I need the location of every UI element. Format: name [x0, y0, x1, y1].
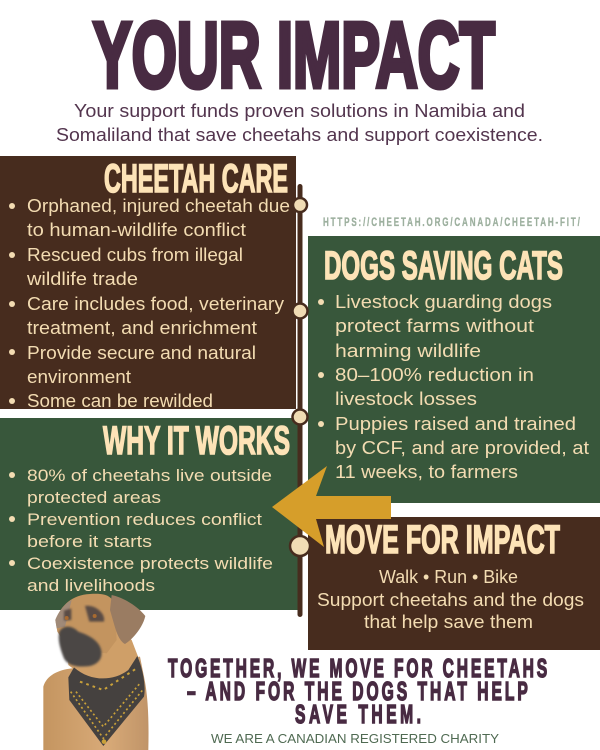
- bullets: cheetah care: Provide secure and natural: [27, 343, 256, 363]
- bullets: dogs saving cats: by CCF, and are provided, at: [335, 438, 589, 458]
- bullets: dogs saving cats: Livestock guarding dogs: [335, 292, 552, 312]
- closing statement: [168, 654, 547, 729]
- timeline: [290, 184, 310, 617]
- icon: dog with bandana: [43, 594, 149, 750]
- bullets: dogs saving cats: 80–100% reduction in: [335, 365, 534, 385]
- charity note: WE ARE A CANADIAN REGISTERED CHARITY: [211, 731, 499, 746]
- bullets: why it works: Prevention reduces conflict: [27, 510, 262, 529]
- closing statement: SAVE THEM.: [295, 700, 421, 729]
- bullets: why it works: [9, 466, 273, 595]
- bullets: why it works: before it starts: [27, 532, 152, 551]
- bullets: why it works: Coexistence protects wildlife: [27, 554, 273, 573]
- bullets: dogs saving cats: [318, 292, 589, 482]
- bullets: cheetah care: to human-wildlife conflict: [27, 220, 246, 240]
- url: HTTPS://CHEETAH.ORG/CANADA/CHEETAH-FIT/: [323, 217, 580, 229]
- bullets: cheetah care: treatment, and enrichment: [27, 318, 257, 338]
- heading: cheetah care: CHEETAH CARE: [104, 157, 288, 201]
- panel: move for impact: [308, 517, 600, 650]
- text: move for impact: Support cheetahs and the dogs: [317, 590, 584, 610]
- arrow: [272, 466, 391, 547]
- closing statement: TOGETHER, WE MOVE FOR CHEETAHS: [168, 654, 547, 683]
- closing statement: – AND FOR THE DOGS THAT HELP: [187, 677, 528, 706]
- bullets: cheetah care: wildlife trade: [26, 269, 138, 289]
- bullets: why it works: 80% of cheetahs live outside: [27, 466, 272, 485]
- heading: why it works: WHY IT WORKS: [103, 419, 290, 463]
- bullets: dogs saving cats: protect farms without: [335, 316, 534, 336]
- bullets: cheetah care: Some can be rewilded: [27, 391, 213, 411]
- text: move for impact: Walk • Run • Bike: [379, 567, 518, 587]
- subtitle: [56, 101, 543, 145]
- bullets: cheetah care: Rescued cubs from illegal: [27, 245, 243, 265]
- bullets: dogs saving cats: harming wildlife: [335, 341, 481, 361]
- text: move for impact: that help save them: [364, 612, 533, 632]
- icon: bandana: [68, 656, 145, 746]
- bullets: cheetah care: environment: [27, 367, 131, 387]
- subtitle: Your support funds proven solutions in Namibia and: [74, 101, 525, 121]
- panel: why it works: [0, 418, 298, 610]
- bullets: why it works: protected areas: [27, 488, 161, 507]
- bullets: why it works: and livelihoods: [27, 576, 155, 595]
- bullets: dogs saving cats: Puppies raised and trained: [335, 414, 576, 434]
- bullets: dogs saving cats: livestock losses: [335, 389, 477, 409]
- subtitle: Somaliland that save cheetahs and support coexistence.: [56, 125, 543, 145]
- bullets: cheetah care: Orphaned, injured cheetah due: [27, 196, 290, 216]
- bullets: dogs saving cats: 11 weeks, to farmers: [335, 462, 518, 482]
- text: move for impact: [317, 567, 584, 632]
- panel: cheetah care: [0, 156, 296, 411]
- bullets: cheetah care: [9, 196, 290, 411]
- bullets: cheetah care: Care includes food, veterinary: [27, 294, 284, 314]
- panel: dogs saving cats: [308, 236, 600, 503]
